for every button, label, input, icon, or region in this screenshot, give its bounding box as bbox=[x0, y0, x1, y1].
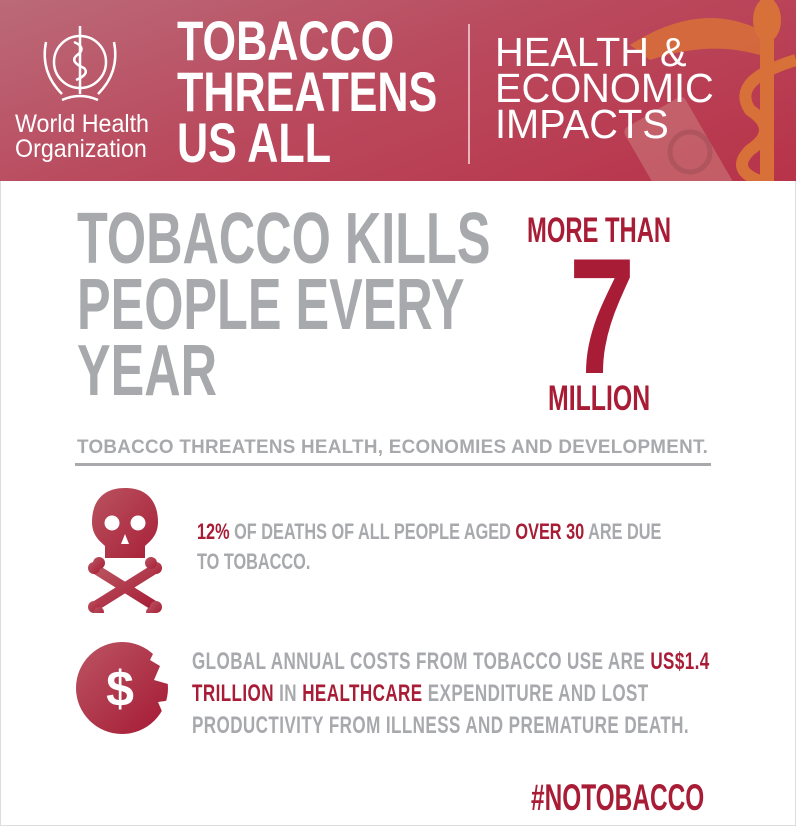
headline: tobacco kills: TOBACCO KILLS bbox=[77, 199, 490, 279]
subtitle header: IMPACTS bbox=[495, 101, 669, 147]
title: THREATENS bbox=[177, 60, 437, 123]
fact 2 text: TRILLION IN HEALTHCARE EXPENDITURE AND LOST bbox=[192, 680, 649, 707]
headline: tobacco kills: PEOPLE EVERY bbox=[77, 265, 464, 345]
subtitle header bbox=[495, 29, 714, 147]
logo text: World Health bbox=[15, 110, 149, 138]
hashtag: #NOTOBACCO bbox=[531, 777, 704, 818]
title: TOBACCO bbox=[177, 9, 394, 72]
title bbox=[177, 9, 437, 174]
fact 1 text bbox=[197, 519, 661, 574]
title: US ALL bbox=[177, 111, 331, 174]
subtitle header: ECONOMIC bbox=[495, 65, 714, 111]
fact 1 text: TO TOBACCO. bbox=[197, 549, 310, 574]
stat: 7 million: 7 bbox=[569, 224, 635, 408]
stat: 7 million: MORE THAN bbox=[527, 211, 671, 250]
icon: cracked dollar coin bbox=[76, 642, 168, 734]
divider bbox=[468, 24, 470, 164]
fact 2 text: PRODUCTIVITY FROM ILLNESS AND PREMATURE DEATH. bbox=[192, 712, 689, 739]
icon: cracked dollar coin: $ bbox=[106, 661, 134, 717]
subheading: TOBACCO THREATENS HEALTH, ECONOMIES AND DEVELOPMENT. bbox=[77, 436, 708, 458]
icon: skull and crossbones bbox=[88, 488, 162, 613]
fact 2 text bbox=[192, 648, 710, 739]
headline: tobacco kills bbox=[77, 199, 490, 411]
icon: caduceus and money decoration bbox=[624, 0, 796, 181]
subtitle header: HEALTH & bbox=[495, 29, 687, 75]
fact 1 text: 12% OF DEATHS OF ALL PEOPLE AGED OVER 30 ARE DUE bbox=[197, 519, 661, 544]
logo text: Organization bbox=[15, 135, 147, 163]
logo: WHO emblem bbox=[44, 26, 116, 102]
header banner bbox=[0, 0, 796, 181]
stat: 7 million bbox=[527, 211, 671, 418]
fact 2 text: GLOBAL ANNUAL COSTS FROM TOBACCO USE ARE US$1.4 bbox=[192, 648, 710, 675]
logo text bbox=[15, 110, 149, 163]
stat: 7 million: MILLION bbox=[548, 379, 650, 418]
headline: tobacco kills: YEAR bbox=[77, 331, 217, 411]
